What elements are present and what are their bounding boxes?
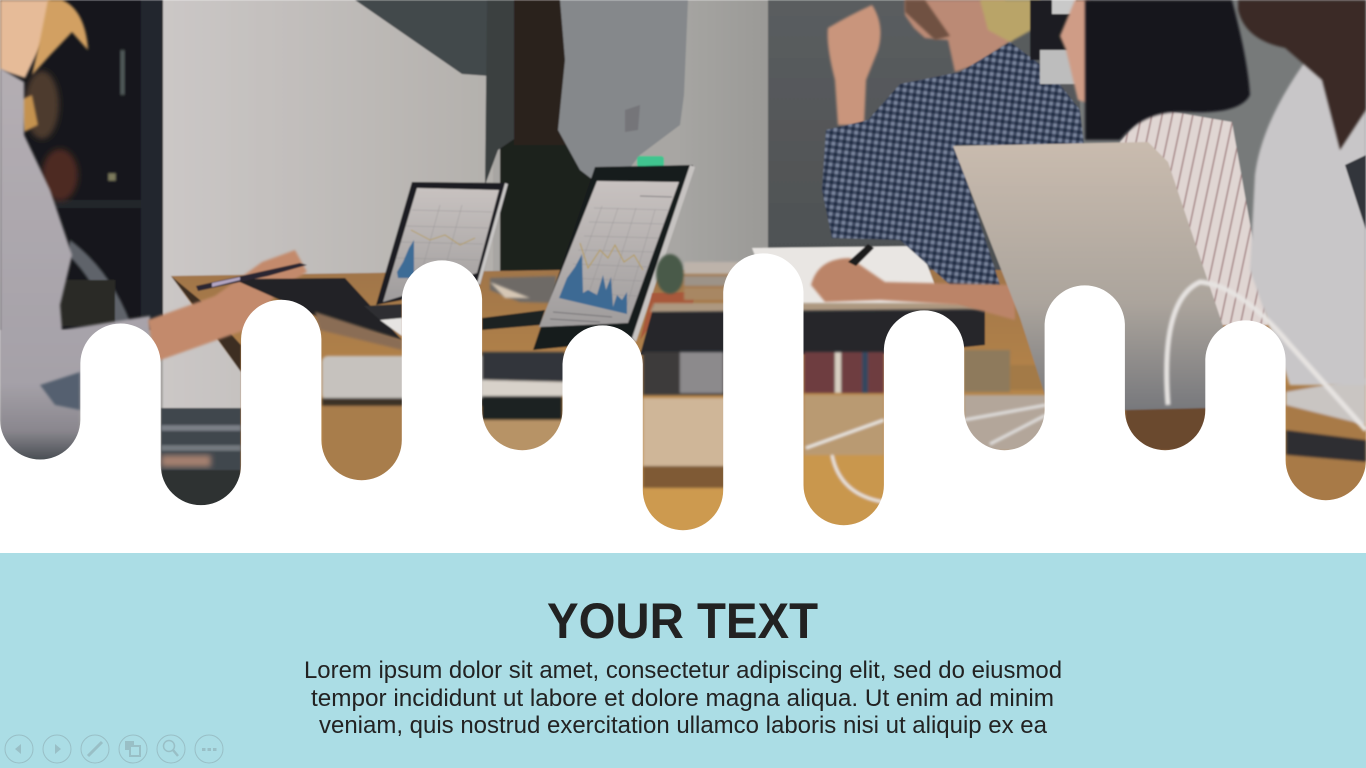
heading: YOUR TEXT [547,593,818,649]
white cable [1167,282,1366,430]
body text: tempor incididunt ut labore et dolore magna aliqua. Ut enim ad minim [311,685,1054,712]
panel: text band [0,553,1366,768]
table [171,270,1366,505]
person on right [1238,0,1366,385]
cactus pot [640,254,695,340]
foreground papers and cables [643,378,1366,532]
silver keyboard base [322,352,565,482]
tablet and pen [196,263,402,350]
large silver laptop [953,142,1226,410]
icon: more [195,735,223,763]
white wave cut-out [0,253,1366,556]
blazer man [355,0,688,272]
icon: next [43,735,71,763]
back wall [0,0,1366,560]
woman on left [0,0,307,462]
body text: veniam, quis nostrud exercitation ullamco laboris nisi ut aliquip ex ea [319,712,1048,739]
woman with dark hair [1030,0,1268,325]
chair [68,240,130,325]
front laptop with chart [533,165,695,350]
body text: Lorem ipsum dolor sit amet, consectetur adipiscing elit, sed do eiusmod [304,657,1062,684]
icon: pen [81,735,109,763]
white notebook and binder [640,246,985,355]
presentation controls [5,735,223,763]
photo: team meeting around a table [0,0,1366,560]
icon: previous [5,735,33,763]
man's hand with pen [811,244,1015,320]
jeans under table [161,408,241,508]
left table edge [171,276,241,372]
striped boxes [643,350,1044,395]
plaid shirt man [822,0,1084,285]
dark glass cabinet [0,0,163,330]
laptop back left [364,182,508,336]
desk clutter [482,276,556,330]
icon: slides [119,735,147,763]
book stack [684,262,754,300]
icon: search [157,735,185,763]
body text [304,657,1062,739]
